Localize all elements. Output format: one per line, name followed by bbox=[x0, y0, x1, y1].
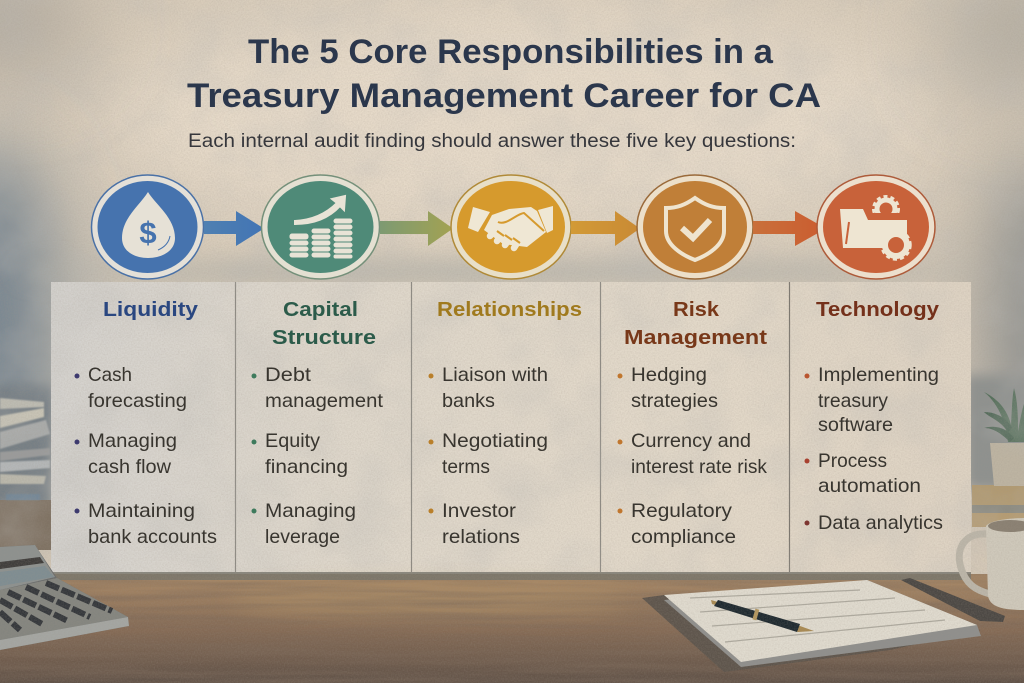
title bbox=[187, 33, 821, 115]
ruler bbox=[901, 578, 1005, 622]
icon: liquidity water drop with dollar: $ bbox=[139, 215, 157, 250]
column: Risk Management: Hedging bbox=[631, 364, 707, 386]
column: Risk Management: Currency and bbox=[631, 430, 751, 452]
column: Capital Structure: Debt bbox=[265, 364, 312, 386]
column: Liquidity: cash flow bbox=[88, 456, 172, 478]
title: Treasury Management Career for CA bbox=[187, 77, 821, 115]
column: Technology: automation bbox=[818, 475, 921, 497]
plant in pot bbox=[965, 375, 1024, 527]
coffee mug bbox=[959, 518, 1024, 610]
icon: risk management shield bbox=[637, 175, 753, 279]
column: Liquidity: forecasting bbox=[88, 390, 187, 412]
column: Risk Management: interest rate risk bbox=[631, 456, 767, 478]
books stack on left bbox=[0, 385, 52, 550]
column: Technology: software bbox=[818, 414, 893, 436]
icon: technology folder and gears bbox=[817, 175, 935, 279]
title: The 5 Core Responsibilities in a bbox=[248, 33, 774, 71]
desk surface bbox=[0, 572, 1024, 683]
column: Capital Structure: financing bbox=[265, 456, 348, 478]
column: Relationships: Relationships bbox=[437, 299, 582, 321]
arrow: risk to technology bbox=[753, 211, 826, 246]
column: Capital Structure bbox=[252, 299, 384, 548]
column: Risk Management: Management bbox=[624, 327, 767, 349]
column: Risk Management: Regulatory bbox=[631, 500, 732, 522]
icon: relationships handshake bbox=[451, 175, 571, 279]
arrow: relationships to risk bbox=[571, 211, 640, 246]
icon: liquidity water drop with dollar bbox=[92, 175, 204, 279]
column: Relationships bbox=[428, 299, 582, 548]
column: Risk Management: Risk bbox=[673, 299, 720, 321]
column: Liquidity: Cash bbox=[88, 364, 132, 386]
clipboard with papers and pen bbox=[642, 580, 981, 672]
column: Capital Structure: leverage bbox=[265, 526, 340, 548]
column: Technology: Technology bbox=[816, 299, 940, 321]
column: Relationships: Liaison with bbox=[442, 364, 548, 386]
column: Relationships: relations bbox=[442, 526, 520, 548]
column: Technology: treasury bbox=[818, 390, 888, 412]
arrow: capital to relationships bbox=[380, 211, 453, 246]
icon: capital structure coins and growth arrow bbox=[262, 175, 380, 279]
column: Liquidity: Managing bbox=[88, 430, 177, 452]
column: Technology: Process bbox=[818, 450, 887, 472]
column: Risk Management: compliance bbox=[631, 526, 736, 548]
column: Risk Management: strategies bbox=[631, 390, 718, 412]
column: Liquidity bbox=[74, 299, 217, 548]
column: Liquidity: Liquidity bbox=[103, 299, 199, 321]
column: Capital Structure: Managing bbox=[265, 500, 356, 522]
column: Relationships: Negotiating bbox=[442, 430, 548, 452]
column: Risk Management bbox=[618, 299, 767, 548]
column: Technology: Implementing bbox=[818, 364, 939, 386]
subtitle: Each internal audit finding should answer these five key questions: bbox=[188, 131, 796, 152]
pen bbox=[711, 600, 814, 632]
calculator bbox=[0, 545, 129, 650]
column: Capital Structure: Equity bbox=[265, 430, 320, 452]
arrow: liquidity to capital bbox=[204, 211, 264, 246]
column: Capital Structure: management bbox=[265, 390, 384, 412]
column: Capital Structure: Capital bbox=[283, 299, 358, 321]
column: Technology bbox=[804, 299, 943, 534]
column: Capital Structure: Structure bbox=[272, 327, 376, 349]
column: Relationships: Investor bbox=[442, 500, 517, 522]
column: Relationships: banks bbox=[442, 390, 495, 412]
column: Technology: Data analytics bbox=[818, 512, 943, 534]
main five-column panel bbox=[51, 282, 971, 573]
column: Relationships: terms bbox=[442, 456, 490, 478]
column: Liquidity: bank accounts bbox=[88, 526, 217, 548]
column: Liquidity: Maintaining bbox=[88, 500, 195, 522]
